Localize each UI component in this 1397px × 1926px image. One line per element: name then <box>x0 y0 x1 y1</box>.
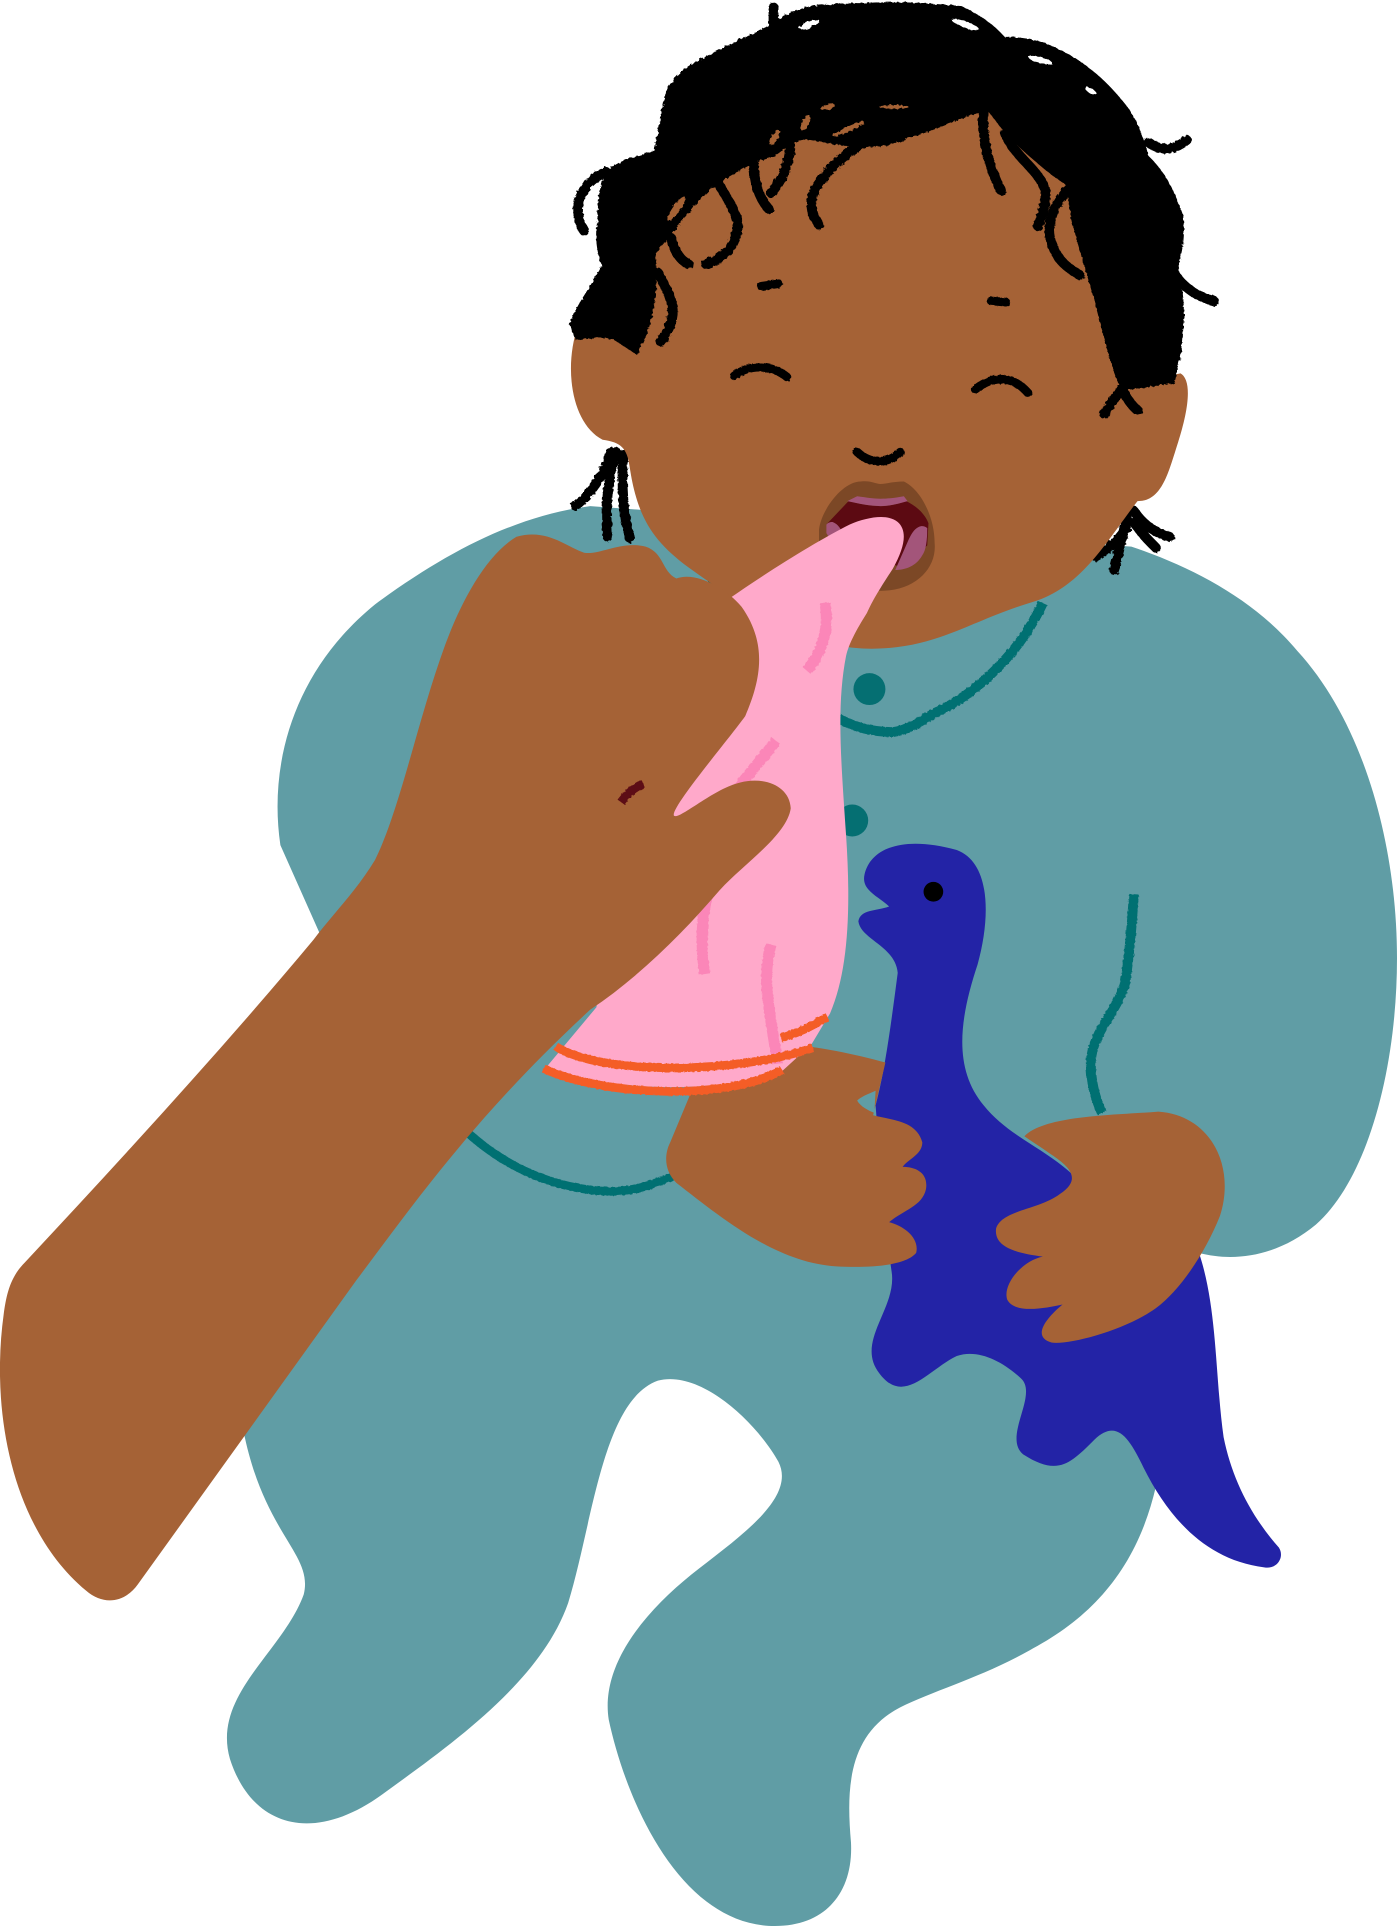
hair mass <box>569 2 1184 391</box>
nose <box>857 452 900 461</box>
hair highlights in skin colour <box>665 103 909 223</box>
collar stroke right <box>839 603 1043 732</box>
hair strands <box>578 7 1214 414</box>
sleeve fold stroke <box>1091 894 1134 1113</box>
lower right hair strands <box>1096 504 1169 570</box>
closed eye left <box>734 367 787 377</box>
lower neckline stroke <box>465 1130 674 1191</box>
baby hand left, on dinosaur <box>666 1044 926 1267</box>
cloth streaks <box>702 603 826 1064</box>
dinosaur body <box>858 844 1281 1568</box>
cloth shape <box>547 517 904 1087</box>
lower left hair strands <box>576 452 630 538</box>
button lower <box>836 805 868 836</box>
hair gaps <box>798 17 1097 96</box>
pink cloth <box>544 517 904 1091</box>
hand mark <box>621 784 643 802</box>
closed eye right <box>975 379 1028 393</box>
lips <box>819 481 935 591</box>
toy dinosaur <box>858 844 1281 1568</box>
dino flank notch <box>857 1091 876 1113</box>
neck collar stroke left <box>711 580 733 609</box>
upper gum <box>847 496 908 506</box>
eyebrow left <box>761 284 778 286</box>
tongue <box>826 522 927 570</box>
button upper <box>853 673 885 705</box>
eyebrow right <box>991 301 1006 302</box>
body: teal sleepsuit <box>227 506 1397 1926</box>
head: face and ears <box>571 86 1188 649</box>
mouth <box>819 481 935 591</box>
baby hand right, holding dinosaur <box>996 1112 1225 1343</box>
cloth hem orange stripes <box>544 1017 828 1091</box>
adult arm and hand <box>0 535 791 1600</box>
mouth interior <box>826 501 928 567</box>
dinosaur eye <box>924 882 943 902</box>
hair <box>569 2 1214 414</box>
